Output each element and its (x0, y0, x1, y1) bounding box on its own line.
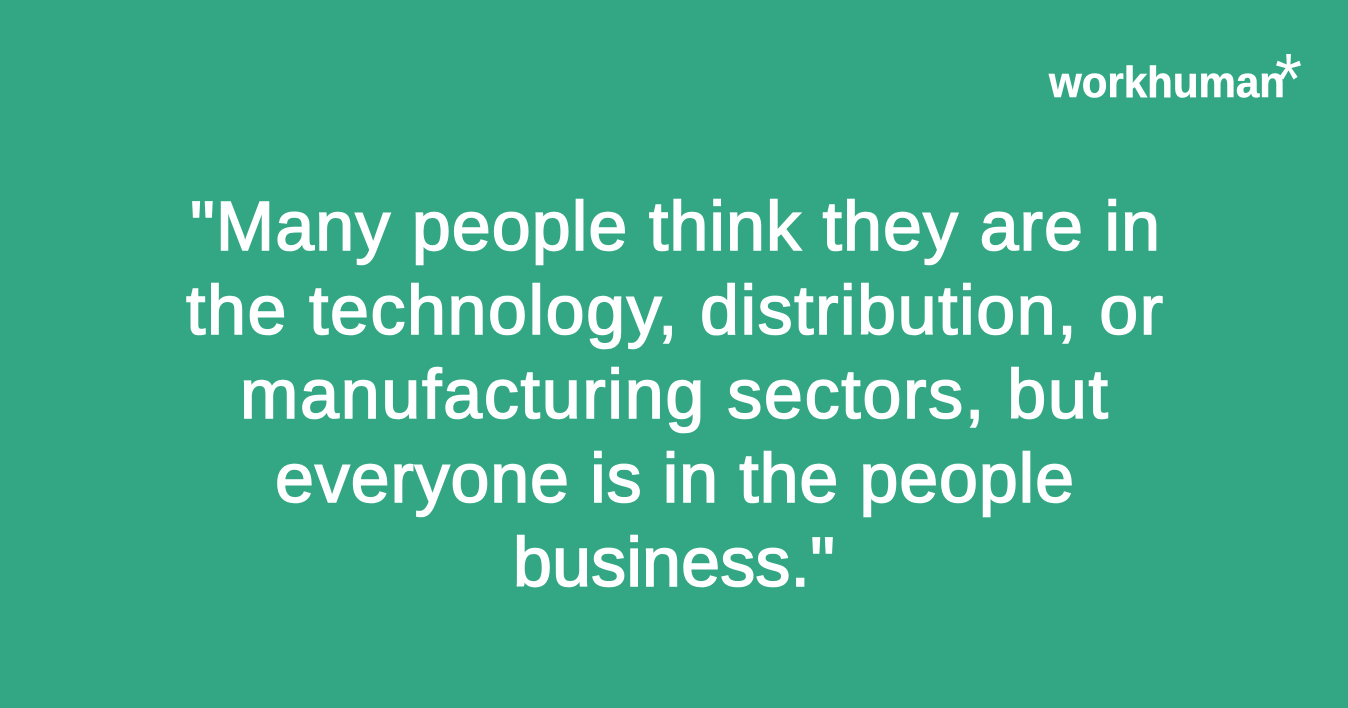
quote text: manufacturing sectors, but (240, 355, 1108, 433)
quote text: "Many people think they are in (190, 187, 1160, 265)
logo: workhuman: workhuman (1048, 58, 1285, 107)
logo: workhuman: * (1275, 40, 1302, 120)
quote text: everyone is in the people (275, 439, 1074, 517)
quote text: business." (513, 523, 835, 601)
quote text: the technology, distribution, or (186, 271, 1163, 349)
logo: workhuman (1048, 40, 1302, 120)
quote text (186, 187, 1163, 601)
